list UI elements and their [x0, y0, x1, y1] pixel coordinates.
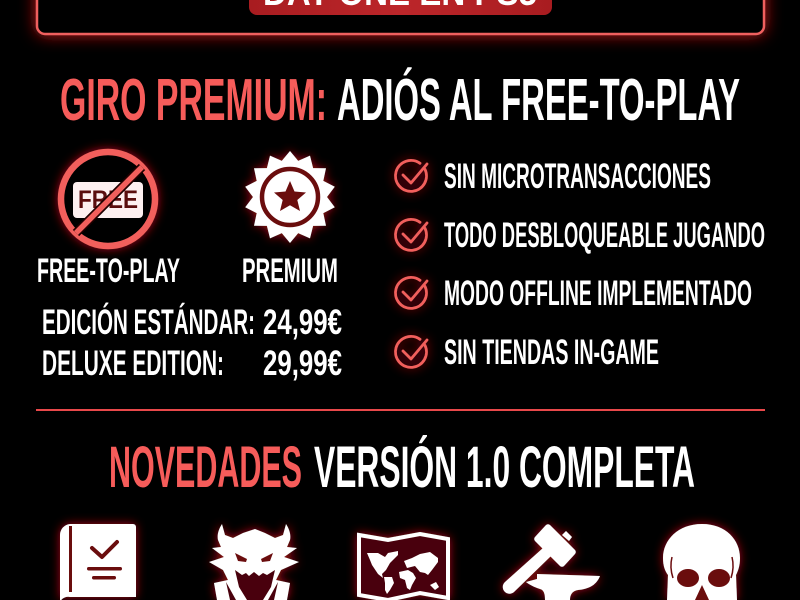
item: sin microtransacciones — [395, 157, 711, 196]
banner frame — [37, 0, 764, 34]
label: free-to-play: FREE-TO-PLAY — [37, 252, 180, 290]
heading: novedades — [109, 435, 695, 500]
heading: giro premium: GIRO PREMIUM: — [60, 67, 327, 133]
icon: free-to-play crossed out — [61, 152, 155, 246]
checklist — [395, 157, 765, 372]
price: deluxe edition: 29,99€ — [263, 344, 342, 383]
icon: world map — [359, 534, 448, 600]
item: sin tiendas in-game — [395, 333, 659, 372]
icon: book with check — [60, 524, 136, 600]
price: deluxe edition: DELUXE EDITION: — [42, 344, 224, 383]
price: standard edition: 24,99€ — [263, 303, 342, 342]
panel: top banner — [37, 0, 764, 34]
heading: novedades: NOVEDADES — [109, 435, 302, 500]
icon: free-to-play crossed out: FREE — [78, 186, 138, 214]
icon: skull — [663, 524, 740, 600]
icon: demon head — [209, 524, 299, 600]
icon: premium badge — [245, 151, 335, 243]
price: standard edition: EDICIÓN ESTÁNDAR: — [42, 302, 255, 342]
label: premium: PREMIUM — [242, 252, 338, 290]
icon: hammer and anvil — [503, 524, 600, 600]
heading: giro premium — [60, 67, 740, 133]
